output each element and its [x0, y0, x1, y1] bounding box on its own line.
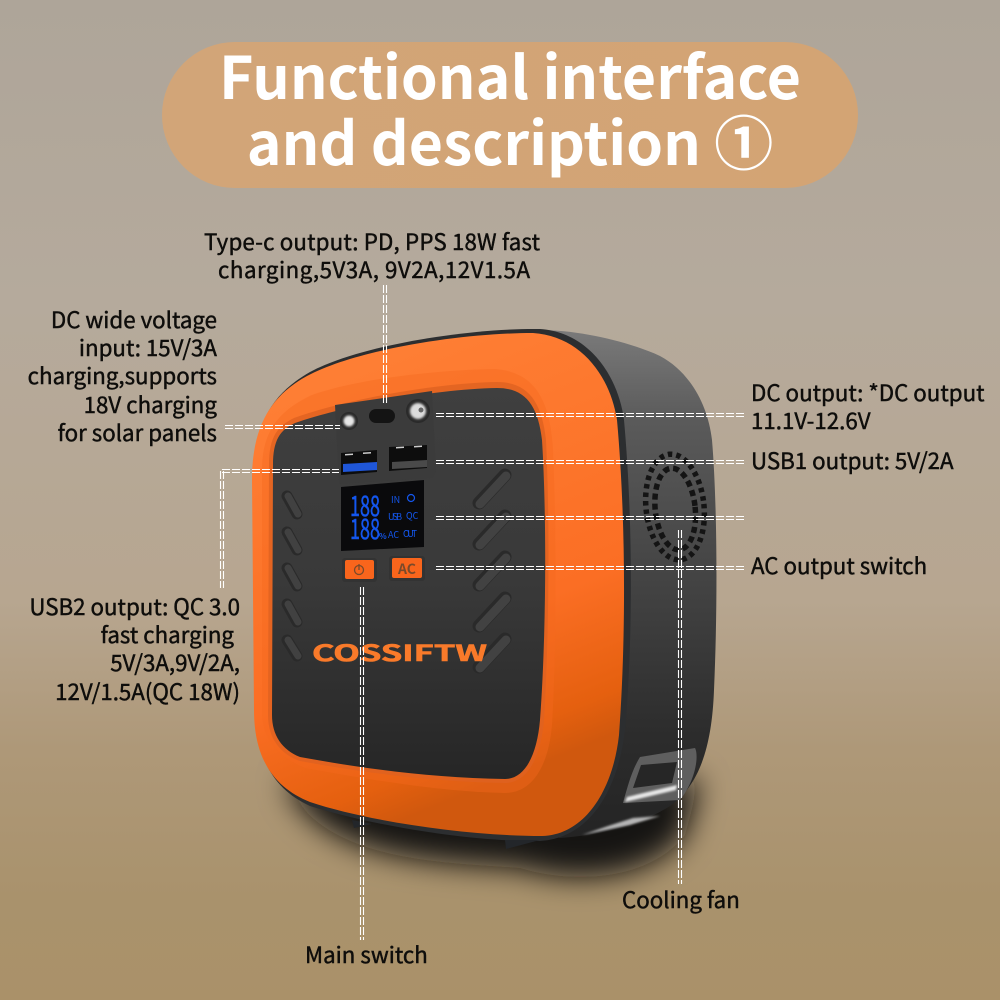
label: DC input: charging,supports	[28, 359, 217, 391]
cooling fan line	[678, 530, 682, 884]
label: DC input: input: 15V/3A	[79, 331, 217, 363]
label: Type-c output: Type-c output: PD, PPS 18W fast	[204, 225, 541, 257]
LCD display: %	[379, 531, 387, 542]
inner lip	[268, 382, 548, 783]
USB2 port	[341, 450, 377, 475]
power button	[342, 558, 377, 582]
dark rim behind orange shell	[255, 329, 631, 841]
LCD display: QC	[406, 509, 419, 522]
type-c port	[369, 409, 395, 423]
connector lines	[220, 285, 745, 940]
inner shell bevel	[262, 369, 556, 793]
label: DC input: DC wide voltage	[51, 303, 217, 335]
orange shell	[252, 333, 624, 836]
LCD display: OUT	[403, 527, 418, 540]
LCD display	[341, 480, 424, 551]
title line two: and description ①	[247, 97, 773, 182]
brand name: COSSIFTW	[312, 636, 487, 668]
feet	[352, 820, 540, 849]
label: DC output	[751, 376, 985, 436]
LCD display: AC	[388, 528, 399, 541]
label: USB2 output: 5V/3A,9V/2A,	[110, 646, 240, 678]
title pill	[162, 31, 858, 188]
bottom side handle recess	[582, 748, 697, 835]
AC button: AC	[397, 559, 416, 579]
DC input port	[340, 412, 358, 430]
AC button	[389, 556, 425, 581]
LCD display: 188	[350, 508, 380, 548]
device side body	[500, 330, 716, 838]
label: USB2 output: USB2 output: QC 3.0	[29, 590, 240, 622]
LCD display: 188	[350, 485, 380, 525]
display line	[436, 516, 745, 520]
port plate	[335, 391, 436, 484]
front panel	[272, 388, 545, 779]
USB2 line	[220, 470, 339, 588]
main switch line	[360, 587, 364, 940]
USB1 port	[389, 445, 427, 471]
label: DC input	[28, 303, 217, 448]
LCD display: USB	[388, 510, 402, 523]
DC input line	[225, 426, 340, 428]
Type-c line	[384, 285, 386, 405]
label: Type-c output: charging,5V3A, 9V2A,12V1.5A	[218, 253, 530, 285]
label: USB2 output	[29, 590, 240, 707]
label: AC output switch: AC output switch	[751, 549, 927, 581]
power station device	[252, 329, 716, 849]
label: DC output: 11.1V-12.6V	[751, 404, 871, 436]
LCD display: IN	[391, 493, 400, 506]
right panel vents	[479, 475, 506, 668]
label: USB2 output: 12V/1.5A(QC 18W)	[55, 675, 240, 707]
side fan grille	[641, 451, 709, 563]
left panel vents	[287, 496, 298, 656]
label: USB1 output: USB1 output: 5V/2A	[751, 444, 954, 476]
title: Functional interface	[219, 31, 801, 116]
AC switch line	[436, 566, 745, 570]
label: DC input: for solar panels	[58, 416, 217, 448]
label: DC input: 18V charging	[84, 388, 217, 420]
label: Type-c output	[204, 225, 541, 285]
USB1 line	[436, 460, 745, 464]
floor shadow	[285, 780, 700, 877]
DC output line	[436, 414, 745, 416]
label: main switch: Main switch	[305, 938, 428, 970]
label: DC output: DC output: *DC output	[751, 376, 985, 408]
label: USB2 output: fast charging	[101, 618, 234, 650]
label: cooling fan: Cooling fan	[622, 883, 740, 915]
DC output port	[406, 399, 430, 423]
